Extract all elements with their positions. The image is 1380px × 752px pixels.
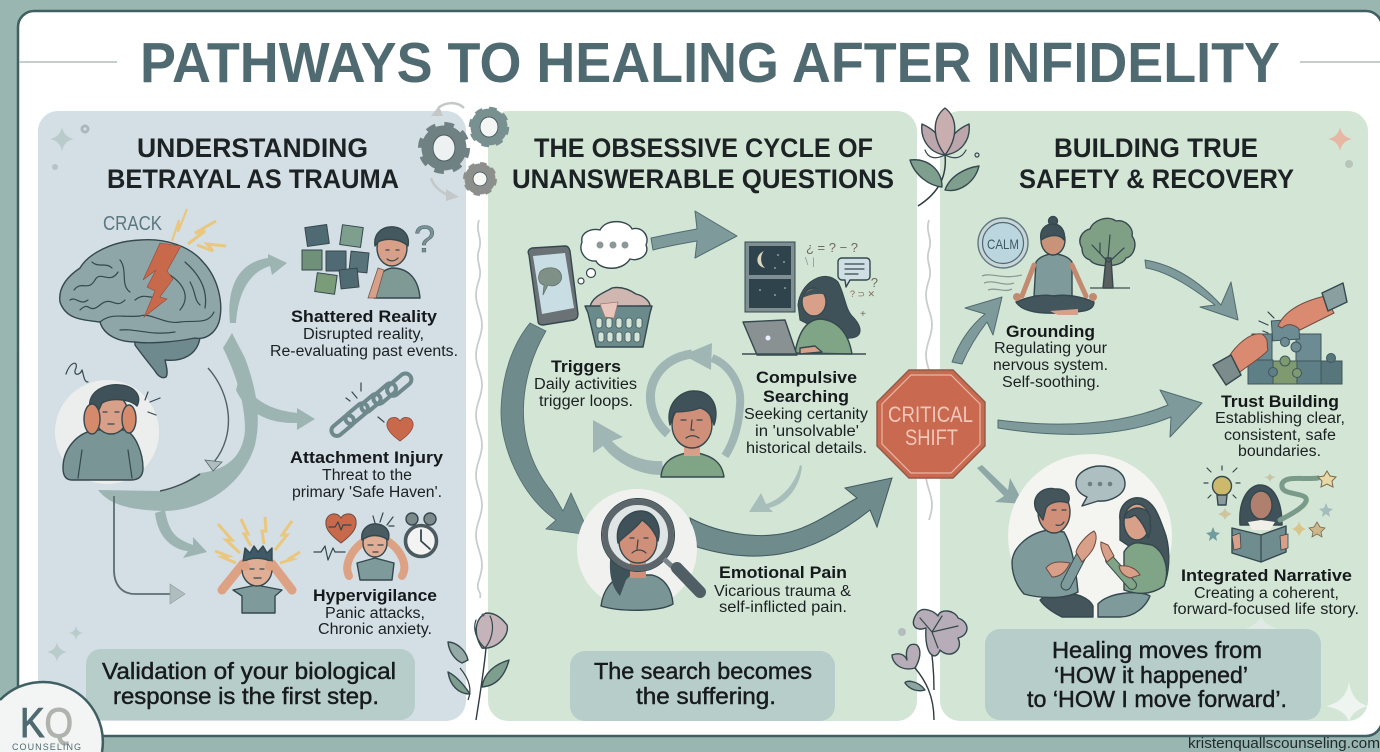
heading: understanding betrayal as trauma: UNDERSTANDING (137, 133, 368, 163)
icon: tree (1080, 218, 1135, 288)
text: integrated narrative: Creating a coherent, (1194, 585, 1339, 602)
callout: validation: response is the first step. (113, 683, 379, 709)
icon: critical shift stop sign: CRITICAL (888, 402, 973, 427)
callout: search becomes suffering: The search becomes (594, 658, 812, 684)
icon: gears (422, 103, 506, 201)
text: hypervigilance: Chronic anxiety. (318, 621, 432, 638)
panel: building true safety and recovery (940, 111, 1368, 722)
text: grounding: Grounding (1006, 322, 1095, 341)
icon: bottom-left flower (448, 613, 509, 720)
heading: understanding betrayal as trauma: BETRAYAL AS TRAUMA (107, 164, 399, 194)
callout: healing moves (985, 629, 1321, 720)
icon: person with book and stars (1204, 466, 1336, 562)
heading: obsessive cycle: UNANSWERABLE QUESTIONS (512, 164, 894, 194)
arrow: grounding to trust building (1145, 260, 1238, 320)
text: triggers: Daily activities (534, 376, 637, 393)
text: attachment injury (290, 448, 444, 501)
text: emotional pain (714, 563, 852, 616)
heading: building true safety and recovery: BUILDING TRUE (1054, 133, 1258, 163)
icon: woman searching at laptop at night: ? ⊃ ✕ (850, 289, 875, 299)
text: triggers (534, 357, 637, 410)
callout: search becomes suffering (570, 651, 835, 721)
text: trust building: Trust Building (1221, 392, 1339, 411)
callout: search becomes suffering: the suffering. (636, 683, 776, 709)
website address: kristenquallscounseling.com (1188, 735, 1380, 752)
icon: woman searching at laptop at night: ∖ | (803, 257, 815, 268)
text: compulsive searching (744, 368, 868, 457)
icon: couple talking (1008, 454, 1172, 618)
wavy dividers (476, 220, 932, 598)
text: trust building: consistent, safe (1224, 427, 1336, 444)
text: hypervigilance: Hypervigilance (313, 586, 437, 605)
arrow: triggers to compulsive searching (651, 211, 737, 258)
text: shattered reality: Re-evaluating past events. (270, 343, 458, 360)
callout: validation (86, 649, 415, 720)
text: hypervigilance (313, 586, 437, 638)
icon: bottom-right flower (892, 609, 967, 720)
panel decoration: sparkles (1237, 127, 1368, 722)
heading: building true safety and recovery (1019, 133, 1294, 194)
icon: hypervigilance heart, person and alarm clock (314, 513, 436, 580)
text: triggers: trigger loops. (539, 393, 633, 410)
icon: critical shift stop sign (877, 370, 985, 478)
icon: broken chain and heart (329, 371, 414, 441)
icon: woman searching at laptop at night: ¿ = ? − ? (806, 240, 858, 255)
text: emotional pain: Vicarious trauma & (714, 583, 852, 600)
icon: calm badge (978, 218, 1028, 290)
heading: building true safety and recovery: SAFETY & RECOVERY (1019, 164, 1294, 194)
icon: shattered reality puzzle tiles and confused person (302, 219, 435, 298)
text: attachment injury: Threat to the (322, 467, 412, 484)
text: shattered reality (270, 307, 458, 360)
heading: obsessive cycle (512, 133, 894, 194)
icon: cracked brain: CRACK (103, 213, 163, 235)
callout: healing moves: to ‘HOW I move forward’. (1027, 686, 1287, 712)
icon: woman searching at laptop at night: + (860, 309, 866, 320)
text: shattered reality: Shattered Reality (291, 307, 438, 326)
icon: woman searching at laptop at night: ? (871, 275, 878, 290)
heading: obsessive cycle: THE OBSESSIVE CYCLE OF (534, 133, 873, 163)
text: integrated narrative: forward-focused life story. (1173, 601, 1359, 618)
callout: healing moves: ‘HOW it happened’ (1054, 662, 1248, 688)
text: trust building (1215, 392, 1345, 460)
text: hypervigilance: Panic attacks, (325, 605, 425, 622)
text: trust building: Establishing clear, (1215, 410, 1345, 427)
text: grounding (993, 322, 1108, 391)
text: integrated narrative (1173, 566, 1359, 618)
icon: sad person in the loop (661, 391, 724, 477)
icon: laundry basket (585, 287, 652, 347)
icon: phone with thought bubble (528, 222, 647, 325)
arrow: shift to trust building (998, 390, 1202, 437)
icon: woman searching at laptop at night (742, 240, 878, 355)
callout: validation: Validation of your biological (102, 658, 396, 684)
icon: hands assembling puzzle (1213, 283, 1347, 385)
text: triggers: Triggers (551, 357, 621, 376)
icon: woman under magnifying glass (577, 489, 700, 610)
callout: healing moves: Healing moves from (1052, 637, 1262, 663)
text: attachment injury: primary 'Safe Haven'. (292, 484, 442, 501)
icon: shattered reality puzzle tiles and confused person: ? (414, 219, 435, 261)
text: compulsive searching: in 'unsolvable' (755, 423, 859, 440)
logo: KQ counseling badge: KQ (20, 699, 73, 746)
title: PATHWAYS TO HEALING AFTER INFIDELITY (140, 31, 1280, 95)
text: compulsive searching: Seeking certanity (744, 406, 868, 423)
arrow: triggers to emotional pain (501, 323, 590, 535)
icon: top flower (910, 108, 979, 206)
icon: panicked person with lightning (215, 517, 300, 613)
panel: understanding betrayal as trauma (38, 111, 466, 721)
text: grounding: Regulating your (994, 340, 1107, 357)
text: emotional pain: Emotional Pain (719, 563, 847, 582)
text: grounding: Self-soothing. (1002, 374, 1100, 391)
text: compulsive searching: Compulsive (756, 368, 857, 387)
text: integrated narrative: Integrated Narrative (1181, 566, 1352, 585)
logo: KQ counseling badge: COUNSELING (12, 742, 81, 752)
text: grounding: nervous system. (993, 357, 1108, 374)
heading: understanding betrayal as trauma (107, 133, 399, 194)
big curved flow arrows (98, 254, 315, 604)
arrow: shift to integrated narrative (977, 465, 1024, 504)
text: attachment injury: Attachment Injury (290, 448, 444, 467)
arrow: shift to grounding (952, 297, 1002, 364)
text: compulsive searching: historical details. (746, 440, 867, 457)
icon: critical shift stop sign: SHIFT (905, 425, 958, 450)
text: shattered reality: Disrupted reality, (303, 326, 424, 343)
text: emotional pain: self-inflicted pain. (719, 599, 847, 616)
icon: cracked brain (60, 209, 226, 378)
panel decoration: sparkles (47, 124, 90, 662)
text: trust building: boundaries. (1238, 443, 1321, 460)
logo: KQ counseling badge (0, 682, 103, 752)
panel: obsessive cycle (488, 111, 917, 721)
text: compulsive searching: Searching (763, 387, 849, 406)
icon: distressed person with hands on head (55, 363, 160, 484)
arrow: emotional pain to critical shift (690, 478, 892, 556)
arrow: central circular loop (593, 343, 802, 512)
icon: meditating person (1013, 216, 1097, 315)
icon: calm badge: CALM (987, 236, 1019, 252)
